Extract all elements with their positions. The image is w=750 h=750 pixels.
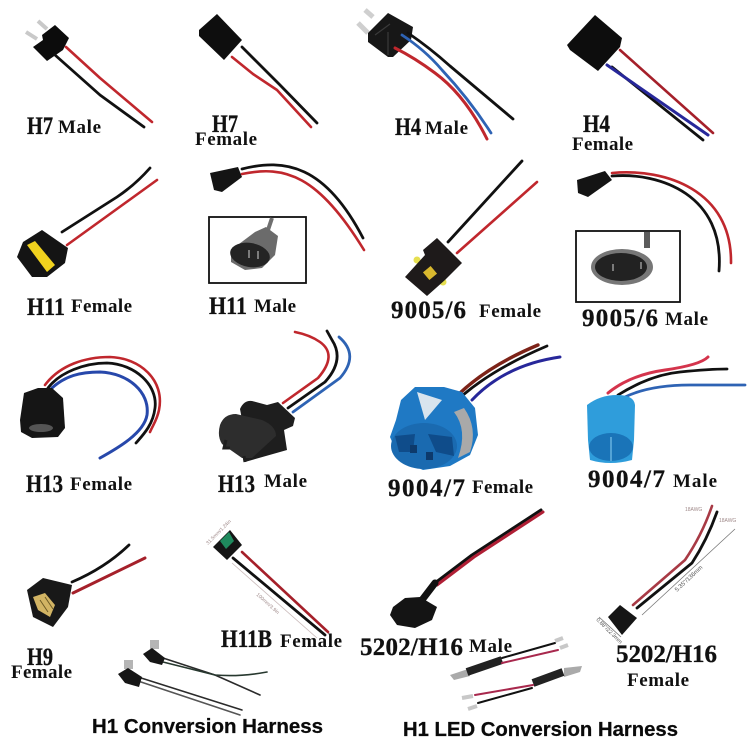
label: H4 Female: Female [572, 134, 633, 155]
panel: H13 Female [20, 357, 160, 498]
label: 9005/6 Male: 9005/6 [582, 305, 658, 332]
wires: H4 female [607, 50, 713, 140]
wires: 9005/6 male [612, 172, 731, 271]
icon: H1 connectors [118, 640, 165, 687]
icon: 9005/6 female connector [405, 238, 462, 296]
wires: H4 male [395, 33, 513, 139]
label: H9 Female: H9 [27, 644, 53, 671]
label: H11 Male: H11 [209, 293, 247, 320]
label: H11 Male [209, 293, 296, 320]
icon: H11B female connector [213, 530, 242, 560]
label: 9004/7 Male [588, 466, 717, 493]
label: H11 Female: Female [71, 296, 132, 317]
label: H7 Male: H7 [27, 113, 53, 140]
icon: H4 male connector [358, 10, 413, 57]
dimension annotations: 18AWG [685, 507, 702, 513]
label: H11B Female: Female [280, 631, 342, 652]
label: H11B Female: H11B [221, 626, 272, 653]
label: 9004/7 Female: 9004/7 [388, 475, 465, 502]
wires: 9004/7 female [460, 345, 560, 400]
icon: H9 female connector [27, 578, 72, 627]
wires: 9004/7 male [608, 357, 745, 397]
label: 5202/H16 Male [360, 634, 512, 661]
label: H4 Female [572, 111, 633, 155]
label: H4 Female: H4 [583, 111, 610, 138]
panel: H4 Male [358, 10, 513, 141]
label: 5202/H16 Male: 5202/H16 [360, 634, 463, 661]
panel: 9005/6 Female [391, 161, 541, 324]
label: H11 Female [27, 294, 132, 321]
label: 9005/6 Male: Male [665, 309, 708, 330]
wires: H11 male [242, 165, 364, 250]
icon: H11 male connector [210, 167, 242, 192]
label: 5202/H16 Male: Male [469, 636, 512, 657]
label: H1 Conversion Harness: H1 Conversion Harness [92, 716, 323, 738]
dimension annotations [595, 507, 736, 646]
label: 9004/7 Male: 9004/7 [588, 466, 665, 493]
icon: H7 female connector [199, 14, 242, 60]
wires: H1 conversion [138, 658, 267, 715]
panel: H1 LED Conversion Harness [403, 638, 678, 741]
label: 5202/H16 Female: Female [627, 670, 689, 691]
dimension lines: H11B: 31.5mm/1.24in [205, 519, 233, 546]
icon: 9005/6 male connector [577, 171, 612, 197]
label: H13 Male: Male [264, 471, 307, 492]
panel: 5202/H16 Male [360, 510, 543, 661]
label: H7 Male [27, 113, 101, 140]
wires: H9 female [72, 545, 145, 593]
label: 9005/6 Female: Female [479, 301, 541, 322]
panel: H1 Conversion Harness [92, 640, 323, 738]
panel: H4 Female [567, 15, 713, 155]
label: H4 Male [395, 114, 468, 141]
panel: 9004/7 Female [388, 345, 560, 502]
icon: H13 female connector [20, 388, 65, 438]
label: H11 Male: Male [254, 296, 296, 317]
label: H13 Female [26, 471, 132, 498]
label: H11B Female [221, 626, 342, 653]
dimension annotations: 0.88"/22.3mm [595, 617, 623, 646]
icon: H13 male connector [219, 401, 295, 462]
label: H4 Male: Male [425, 118, 468, 139]
label: H7 Female: Female [195, 129, 257, 150]
panel: 5202/H16 Female [595, 506, 736, 691]
label: H4 Male: H4 [395, 114, 421, 141]
label: 5202/H16 Female [616, 641, 717, 691]
icon: 5202/H16 female connector [608, 605, 637, 635]
panel: H11B Female [205, 519, 342, 653]
label: 9005/6 Female [391, 297, 541, 324]
panel: H7 Male [26, 21, 152, 140]
dimension lines: H11B [205, 519, 317, 638]
panel: H11 Male [209, 165, 364, 320]
label: H7 Male: Male [58, 117, 101, 138]
icon: H7 male connector [26, 21, 69, 61]
label: H13 Female: Female [70, 474, 132, 495]
panel: H7 Female [195, 14, 317, 150]
label: H7 Female [195, 111, 257, 150]
dimension annotations: 18AWG [719, 518, 736, 524]
label: 9004/7 Male: Male [673, 471, 717, 492]
wires: 9005/6 female [448, 161, 537, 253]
label: 9004/7 Female: Female [472, 477, 533, 498]
lower LED harness [462, 666, 582, 709]
wires: H7 female [232, 47, 317, 127]
label: 9005/6 Female: 9005/6 [391, 297, 466, 324]
wires: H13 female [45, 357, 160, 458]
icon: 9004/7 female connector [390, 387, 478, 470]
label: H9 Female [11, 644, 72, 683]
label: H1 LED Conversion Harness: H1 LED Conversion Harness [403, 719, 678, 741]
inset: 9005/6 male socket [576, 231, 680, 302]
label: H9 Female: Female [11, 662, 72, 683]
icon: H11 female connector [17, 230, 68, 277]
panel: H13 Male [218, 331, 350, 498]
wires: 5202/H16 male [422, 510, 543, 600]
dimension annotations: 5.35"/136mm [674, 565, 704, 593]
icon: H4 female connector [567, 15, 622, 71]
icon: 5202/H16 male connector [390, 597, 437, 628]
label: H11 Female: H11 [27, 294, 65, 321]
panel: 9004/7 Male [587, 357, 745, 493]
panel: H9 Female [11, 545, 145, 683]
wires: H11B female [233, 552, 328, 635]
wires: H11 female [62, 168, 157, 245]
label: H13 Male: H13 [218, 471, 255, 498]
label: 9005/6 Male [582, 305, 708, 332]
wires: H13 male [283, 331, 350, 412]
upper LED harness [450, 638, 568, 680]
wires: H7 male [55, 47, 152, 127]
icon: 9004/7 male connector [587, 395, 635, 463]
label: 9004/7 Female [388, 475, 533, 502]
panel: 9005/6 Male [576, 171, 731, 332]
dimension lines: H11B: 100mm/3.9in [255, 592, 280, 616]
inset: H11 male socket [209, 217, 306, 283]
label: H7 Female: H7 [212, 111, 238, 138]
label: H13 Female: H13 [26, 471, 63, 498]
label: H13 Male [218, 471, 307, 498]
label: 5202/H16 Female: 5202/H16 [616, 641, 717, 668]
panel: H11 Female [17, 168, 157, 321]
wires: 5202/H16 female [633, 506, 717, 608]
